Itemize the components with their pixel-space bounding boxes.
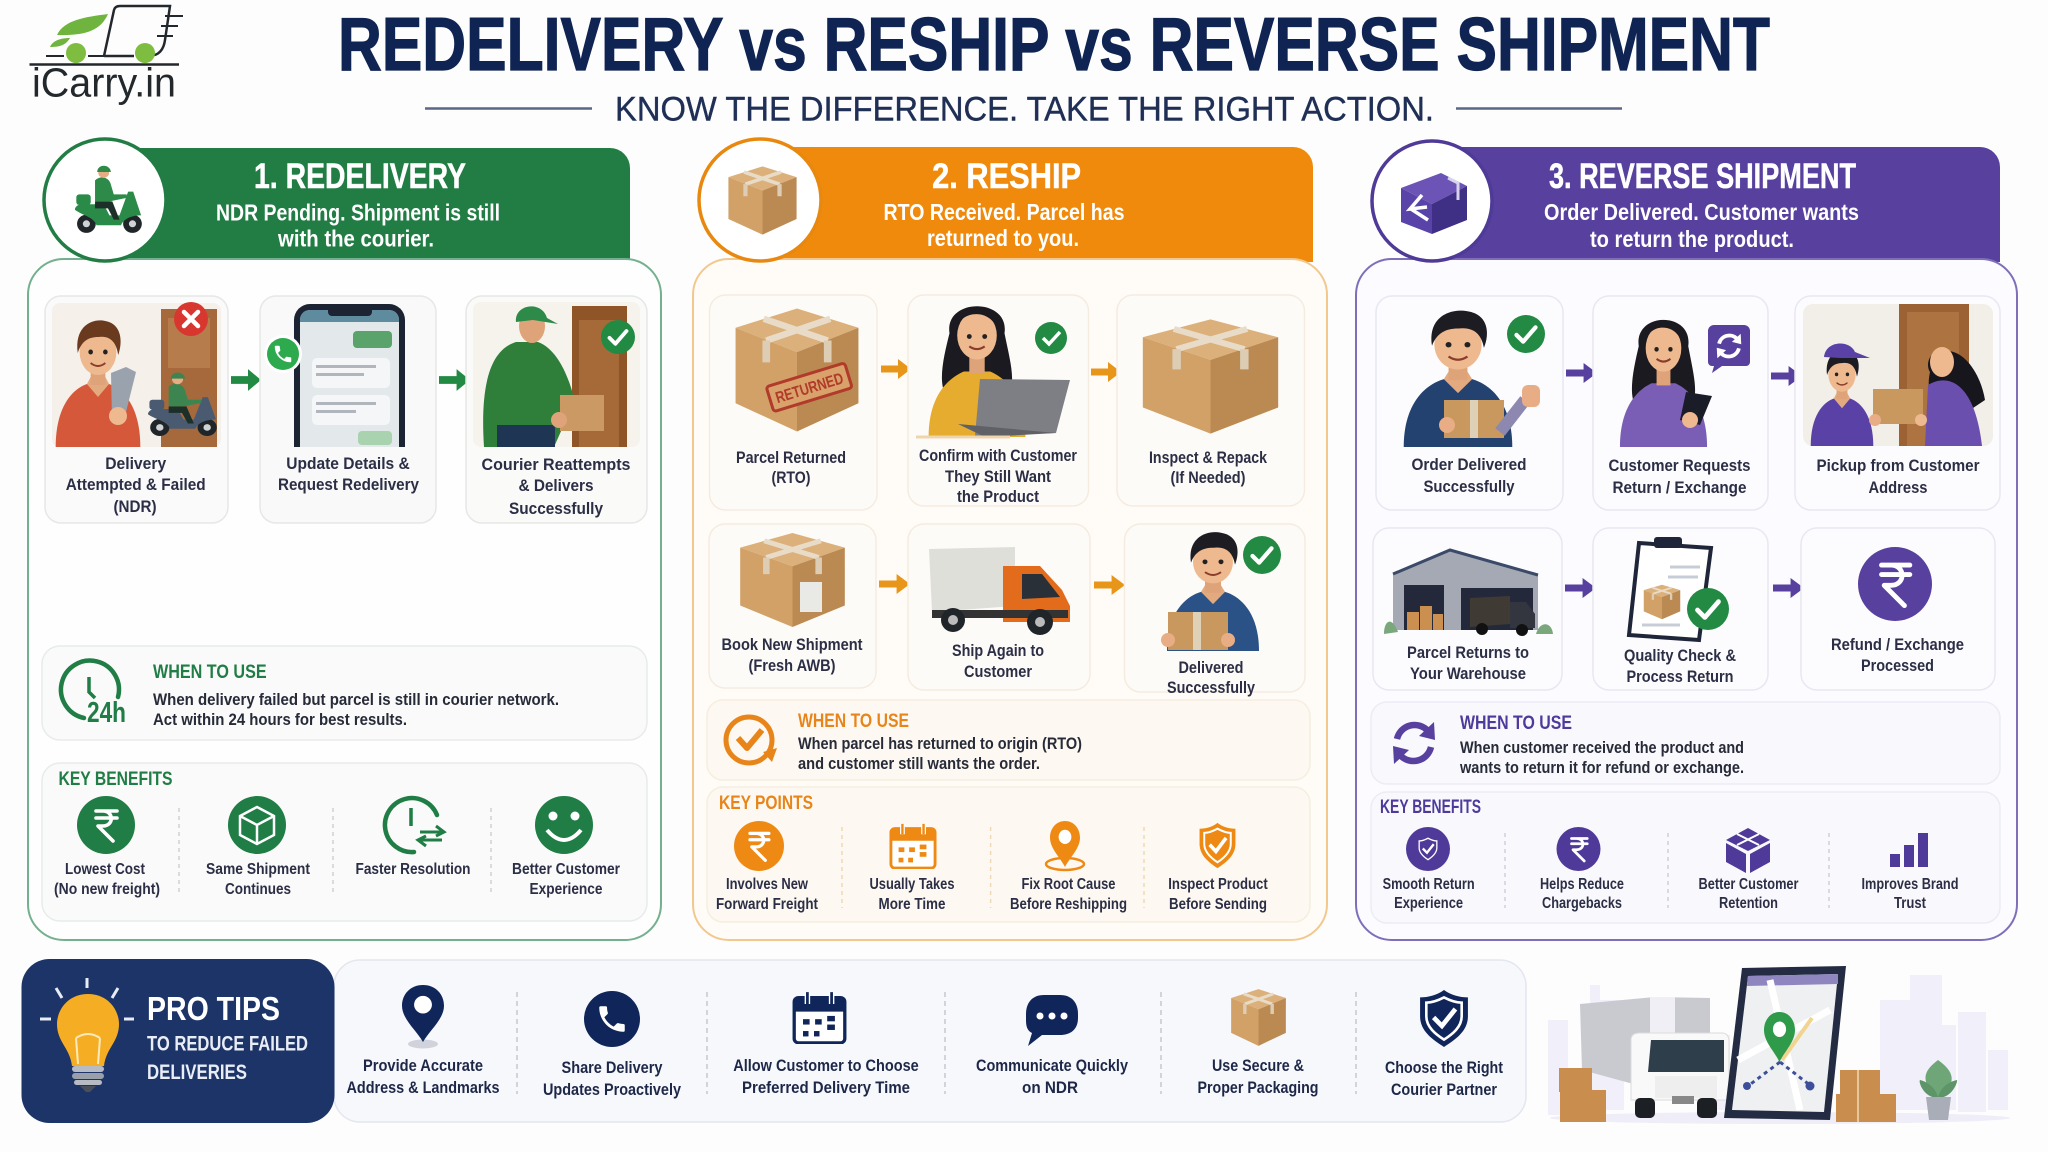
icon: light bulb [40, 978, 134, 1092]
benefit: lowest cost [54, 796, 160, 898]
step: inspect and repack: (If Needed) [1170, 468, 1246, 487]
step: book new shipment: Book New Shipment [722, 635, 863, 654]
benefit: brand trust [1862, 833, 1958, 912]
header: reship [770, 147, 1313, 262]
point: new forward freight: Involves New [726, 876, 808, 893]
header: reverse shipment [1440, 147, 2000, 262]
benefit: faster resolution [356, 798, 470, 878]
tip: secure packaging: Use Secure & [1212, 1056, 1304, 1075]
icon: return box [1372, 141, 1492, 261]
tip: right courier partner [1385, 990, 1503, 1099]
step: parcel returns to warehouse: Parcel Returns to [1407, 643, 1529, 662]
step: confirm with customer: the Product [957, 487, 1039, 506]
step: confirm with customer [908, 295, 1088, 506]
step: book new shipment [709, 524, 876, 688]
tip: communicate quickly: on NDR [1022, 1078, 1078, 1097]
arrow [879, 574, 910, 594]
step: quality check: Process Return [1626, 667, 1734, 686]
header: reship: returned to you. [927, 225, 1079, 251]
key benefits: reverse: KEY BENEFITS [1380, 797, 1481, 818]
benefit: better experience [512, 796, 620, 898]
step card: delivery attempted and failed: Attempted & Failed [66, 475, 206, 494]
step: ship again: Customer [964, 662, 1032, 681]
panel: reship [693, 139, 1327, 940]
step card: courier reattempts: Successfully [509, 499, 603, 518]
step card: courier reattempts [466, 296, 647, 523]
header: reverse shipment: to return the product. [1590, 226, 1794, 252]
step: ship again [908, 524, 1090, 690]
tip: share updates [543, 991, 681, 1099]
tip: preferred time [733, 992, 919, 1097]
logo: iCarry.in: iCarry.in [32, 60, 176, 106]
step: delivered successfully [1124, 524, 1305, 697]
step: book new shipment: (Fresh AWB) [748, 656, 836, 675]
step: parcel returns to warehouse: Your Warehouse [1410, 664, 1526, 683]
step: delivered successfully: Successfully [1167, 678, 1255, 697]
tip: accurate address [346, 985, 500, 1097]
tip: accurate address: Address & Landmarks [346, 1078, 500, 1097]
step: refund processed: Processed [1861, 656, 1934, 675]
header: redelivery [120, 148, 630, 262]
step: pickup from customer [1795, 296, 2000, 510]
step: parcel returned: Parcel Returned [736, 448, 846, 467]
step: delivered successfully: Delivered [1178, 658, 1244, 677]
point: takes more time [870, 824, 955, 913]
arrow [231, 369, 261, 391]
logo: iCarry.in [30, 6, 183, 106]
when to use: redelivery [42, 646, 647, 740]
step: order delivered: Order Delivered [1412, 455, 1526, 474]
step: parcel returned: (RTO) [772, 468, 810, 487]
arrow [881, 359, 911, 379]
benefit: better experience: Better Customer [512, 861, 620, 878]
tip: right courier partner: Choose the Right [1385, 1058, 1503, 1077]
point: inspect product [1168, 823, 1268, 913]
point: new forward freight: Forward Freight [716, 896, 819, 913]
header: reverse shipment: Order Delivered. Customer wants [1544, 199, 1859, 225]
pro tips badge: TO REDUCE FAILED [147, 1032, 308, 1056]
header: reverse shipment: 3. REVERSE SHIPMENT [1549, 157, 1856, 196]
step: quality check: Quality Check & [1624, 646, 1736, 665]
benefit: same shipment: Continues [225, 881, 291, 898]
step card: delivery attempted and failed: Delivery [105, 454, 167, 473]
tip: secure packaging [1198, 989, 1318, 1097]
step: customer requests return: Customer Requests [1608, 456, 1750, 475]
icon: refresh arrows [1393, 722, 1435, 764]
when to use: redelivery: When delivery failed but parcel is still in courier network. [153, 690, 559, 709]
panel: redelivery [28, 139, 661, 940]
tip: preferred time: Preferred Delivery Time [742, 1078, 910, 1097]
point: takes more time: More Time [878, 896, 946, 913]
point: new forward freight [716, 821, 819, 913]
step: pickup from customer: Address [1868, 478, 1928, 497]
point: fix root cause: Before Reshipping [1010, 896, 1127, 913]
tip: share updates: Share Delivery [562, 1058, 663, 1077]
when to use: reship: When parcel has returned to origin (RTO) [798, 734, 1082, 753]
step: refund processed: Refund / Exchange [1831, 635, 1964, 654]
benefit: brand trust: Improves Brand [1862, 876, 1958, 893]
step: pickup from customer: Pickup from Customer [1816, 456, 1980, 475]
when to use: reverse: wants to return it for refund or exchange. [1459, 758, 1744, 777]
benefit: customer retention: Retention [1719, 895, 1778, 912]
step: confirm with customer: Confirm with Customer [919, 446, 1077, 465]
benefit: smooth return [1383, 827, 1475, 912]
when to use: reship: and customer still wants the order. [798, 754, 1040, 773]
step: parcel returned: RETURNED [774, 370, 846, 407]
benefit: lowest cost: (No new freight) [54, 881, 160, 898]
benefit: brand trust: Trust [1894, 895, 1927, 912]
benefit: lowest cost: Lowest Cost [65, 861, 146, 878]
step: ship again: Ship Again to [952, 641, 1044, 660]
benefit: better experience: Experience [530, 881, 603, 898]
icon: 24h clock [61, 661, 126, 729]
when to use: reship: WHEN TO USE [798, 711, 909, 732]
benefit: reduce chargebacks: Helps Reduce [1540, 876, 1624, 893]
step: customer requests return: Return / Exchange [1612, 478, 1746, 497]
panel body [693, 259, 1327, 940]
benefit: faster resolution: Faster Resolution [356, 861, 470, 878]
step: order delivered [1376, 296, 1563, 510]
icon: green scooter [44, 139, 166, 261]
header: redelivery: with the courier. [277, 226, 434, 252]
step card: courier reattempts: Courier Reattempts [482, 455, 630, 474]
benefit: reduce chargebacks: Chargebacks [1542, 895, 1622, 912]
step: customer requests return [1593, 296, 1768, 510]
step: inspect and repack [1117, 295, 1304, 506]
when to use: reverse [1371, 702, 2000, 784]
key benefits: reverse [1371, 792, 2000, 923]
icon: orange check cycle [726, 717, 777, 763]
arrow [439, 369, 470, 391]
pro tips strip [334, 960, 1526, 1122]
benefit: same shipment [206, 796, 311, 898]
arrow [1771, 366, 1802, 386]
step: confirm with customer: They Still Want [945, 467, 1051, 486]
panel body [1356, 259, 2017, 940]
benefit: customer retention: Better Customer [1698, 876, 1798, 893]
step: order delivered: Successfully [1424, 477, 1515, 496]
arrow [1565, 578, 1596, 598]
tip: right courier partner: Courier Partner [1391, 1080, 1497, 1099]
panel: reverse shipment [1356, 141, 2017, 940]
step: refund processed [1801, 528, 1995, 690]
step card: update details: Update Details & [286, 454, 410, 473]
icon: parcel [699, 139, 821, 261]
step: quality check [1593, 528, 1768, 690]
pro tips badge: DELIVERIES [147, 1061, 247, 1084]
key benefits: redelivery [42, 763, 647, 921]
when to use: redelivery: Act within 24 hours for best results. [153, 710, 407, 729]
step: parcel returned [710, 295, 877, 510]
key points: reship [707, 787, 1310, 922]
benefit: smooth return: Smooth Return [1383, 876, 1475, 893]
icon: 24h clock: 24h [87, 697, 126, 729]
key benefits: redelivery: KEY BENEFITS [58, 769, 172, 790]
step: inspect and repack: Inspect & Repack [1149, 448, 1267, 467]
tip: communicate quickly [976, 995, 1128, 1097]
point: fix root cause [1010, 821, 1127, 913]
point: inspect product: Inspect Product [1168, 876, 1268, 893]
panel body [28, 259, 661, 940]
point: inspect product: Before Sending [1169, 896, 1267, 913]
when to use: reverse: When customer received the product and [1460, 738, 1744, 757]
point: takes more time: Usually Takes [870, 876, 955, 893]
when to use: reverse: WHEN TO USE [1460, 713, 1572, 734]
tip: share updates: Updates Proactively [543, 1080, 681, 1099]
subtitle: KNOW THE DIFFERENCE. TAKE THE RIGHT ACTION. [615, 90, 1434, 128]
arrow [1566, 363, 1597, 383]
tip: secure packaging: Proper Packaging [1198, 1078, 1318, 1097]
illustration: delivery truck and phone map [1548, 966, 2010, 1124]
benefit: reduce chargebacks [1540, 827, 1624, 912]
benefit: smooth return: Experience [1394, 895, 1463, 912]
header: redelivery: 1. REDELIVERY [254, 157, 466, 196]
step card: delivery attempted and failed [45, 296, 228, 523]
point: fix root cause: Fix Root Cause [1022, 876, 1116, 893]
benefit: same shipment: Same Shipment [206, 861, 311, 878]
step card: update details: Request Redelivery [278, 475, 419, 494]
tip: communicate quickly: Communicate Quickly [976, 1056, 1128, 1075]
pro tips badge [22, 959, 334, 1123]
step card: courier reattempts: & Delivers [518, 476, 594, 495]
benefit: customer retention [1698, 828, 1798, 912]
header: redelivery: NDR Pending. Shipment is still [216, 200, 500, 226]
arrow [1091, 362, 1121, 382]
header: reship: 2. RESHIP [932, 157, 1081, 196]
step card: update details [260, 296, 436, 523]
pro tips badge: PRO TIPS [147, 990, 280, 1027]
header: reship: RTO Received. Parcel has [884, 199, 1124, 225]
step card: delivery attempted and failed: (NDR) [114, 497, 156, 516]
step: parcel returns to warehouse [1373, 528, 1562, 690]
tip: accurate address: Provide Accurate [363, 1056, 483, 1075]
when to use: redelivery: WHEN TO USE [153, 662, 267, 683]
arrow [1094, 575, 1125, 595]
arrow [1773, 578, 1804, 598]
key points: reship: KEY POINTS [719, 793, 813, 814]
tip: preferred time: Allow Customer to Choose [733, 1056, 919, 1075]
when to use: reship [707, 700, 1310, 780]
